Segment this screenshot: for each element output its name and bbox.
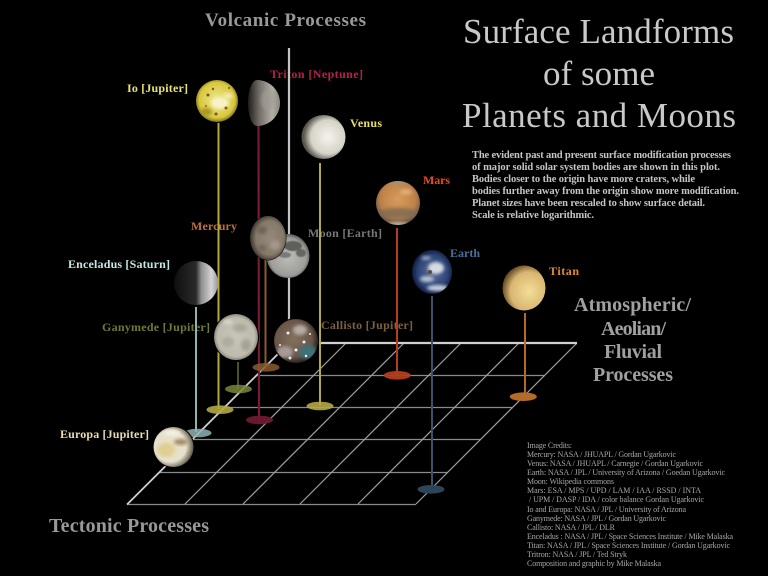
image credits: Composition and graphic by Mike Malaska <box>527 559 661 568</box>
image credits: Titan: NASA / JPL / Space Sciences Institute / Gordan Ugarkovic <box>527 541 730 550</box>
marker: Ganymede <box>225 362 252 393</box>
planet: Mars <box>376 180 420 226</box>
description text block: Scale is relative logarithmic. <box>472 210 594 221</box>
axis heading: atmospheric aeolian fluvial processes: Processes <box>593 364 673 386</box>
vertical axis: volcanic <box>288 48 290 343</box>
axis heading: atmospheric aeolian fluvial processes <box>574 294 691 386</box>
planet: Mercury <box>250 216 286 260</box>
label: Callisto: Callisto [Jupiter] <box>321 318 413 332</box>
title: Surface Landforms <box>463 12 734 51</box>
axis heading: atmospheric aeolian fluvial processes: Atmospheric/ <box>574 294 691 316</box>
stems and base markers <box>184 120 537 494</box>
marker: Triton <box>246 124 273 424</box>
label: Io: Io [Jupiter] <box>127 81 188 95</box>
description text block: of major solid solar system bodies are shown in this plot. <box>472 162 720 173</box>
label: Triton: Triton [Neptune] <box>270 67 363 81</box>
planet: Triton <box>248 80 280 126</box>
description text block: Planet sizes have been rescaled to show surface detail. <box>472 198 705 209</box>
description text block: The evident past and present surface modification processes <box>472 150 731 161</box>
label: Mars: Mars <box>423 173 450 187</box>
image credits: Venus: NASA / JHUAPL / Carnegie / Gordan Ugarkovic <box>527 459 703 468</box>
planet labels <box>60 67 579 441</box>
planet: Enceladus <box>174 261 218 305</box>
image credits: / UPM / DASP / IDA / color balance Gordan Ugarkovic <box>529 495 704 504</box>
planet: Earth <box>412 250 452 294</box>
image credits: Mars: ESA / MPS / UPD / LAM / IAA / RSSD / INTA <box>527 486 701 495</box>
image credits: Io and Europa: NASA / JPL / University of Arizona <box>527 505 686 514</box>
label: Ganymede: Ganymede [Jupiter] <box>102 320 210 334</box>
planet: Ganymede <box>213 313 259 361</box>
planet: Io <box>195 79 239 123</box>
title <box>462 12 736 135</box>
marker: Earth <box>418 296 444 494</box>
title: of some <box>543 54 655 93</box>
image credits: Callisto: NASA / JPL / DLR <box>527 523 616 532</box>
marker: Io <box>206 120 234 414</box>
planet: Europa <box>152 426 194 468</box>
planet: Titan <box>502 266 546 310</box>
label: Moon: Moon [Earth] <box>308 226 382 240</box>
image credits: Enceladus : NASA / JPL / Space Sciences Institute / Mike Malaska <box>527 532 733 541</box>
label: Venus: Venus <box>350 116 382 130</box>
label: Earth: Earth <box>450 246 480 260</box>
description text block <box>472 150 739 221</box>
planet: Callisto <box>273 318 319 364</box>
image credits: Image Credits: <box>527 441 572 450</box>
label: Titan: Titan <box>549 264 579 278</box>
marker: Titan <box>510 313 537 401</box>
axis heading: atmospheric aeolian fluvial processes: Fluvial <box>604 341 662 363</box>
title: Planets and Moons <box>462 96 736 135</box>
image credits: Ganymede: NASA / JPL / Gordan Ugarkovic <box>527 514 666 523</box>
label: Enceladus: Enceladus [Saturn] <box>68 257 170 271</box>
label: Europa: Europa [Jupiter] <box>60 427 149 441</box>
image credits <box>527 441 733 568</box>
image credits: Earth: NASA / JPL / University of Arizona / Goedan Ugarkovic <box>527 468 725 477</box>
axis heading: tectonic processes: Tectonic Processes <box>49 515 209 537</box>
ground plane grid <box>127 343 577 504</box>
marker: Mercury <box>252 258 280 372</box>
axis heading: atmospheric aeolian fluvial processes: Aeolian/ <box>601 318 666 340</box>
description text block: Bodies closer to the origin have more craters, while <box>472 174 695 185</box>
description text block: bodies further away from the origin show more modification. <box>472 186 739 197</box>
marker: Venus <box>306 163 334 410</box>
label: Mercury: Mercury <box>191 219 237 233</box>
planet: Venus <box>302 115 346 159</box>
image credits: Tritron: NASA / JPL / Ted Stryk <box>527 550 627 559</box>
marker: Enceladus <box>184 307 212 437</box>
image credits: Moon: Wikipedia commons <box>527 477 614 486</box>
axis heading: volcanic processes: Volcanic Processes <box>205 10 366 31</box>
image credits: Mercury: NASA / JHUAPL / Gordan Ugarkovic <box>527 450 676 459</box>
planet: Moon <box>266 234 310 278</box>
marker: Mars <box>384 228 411 380</box>
